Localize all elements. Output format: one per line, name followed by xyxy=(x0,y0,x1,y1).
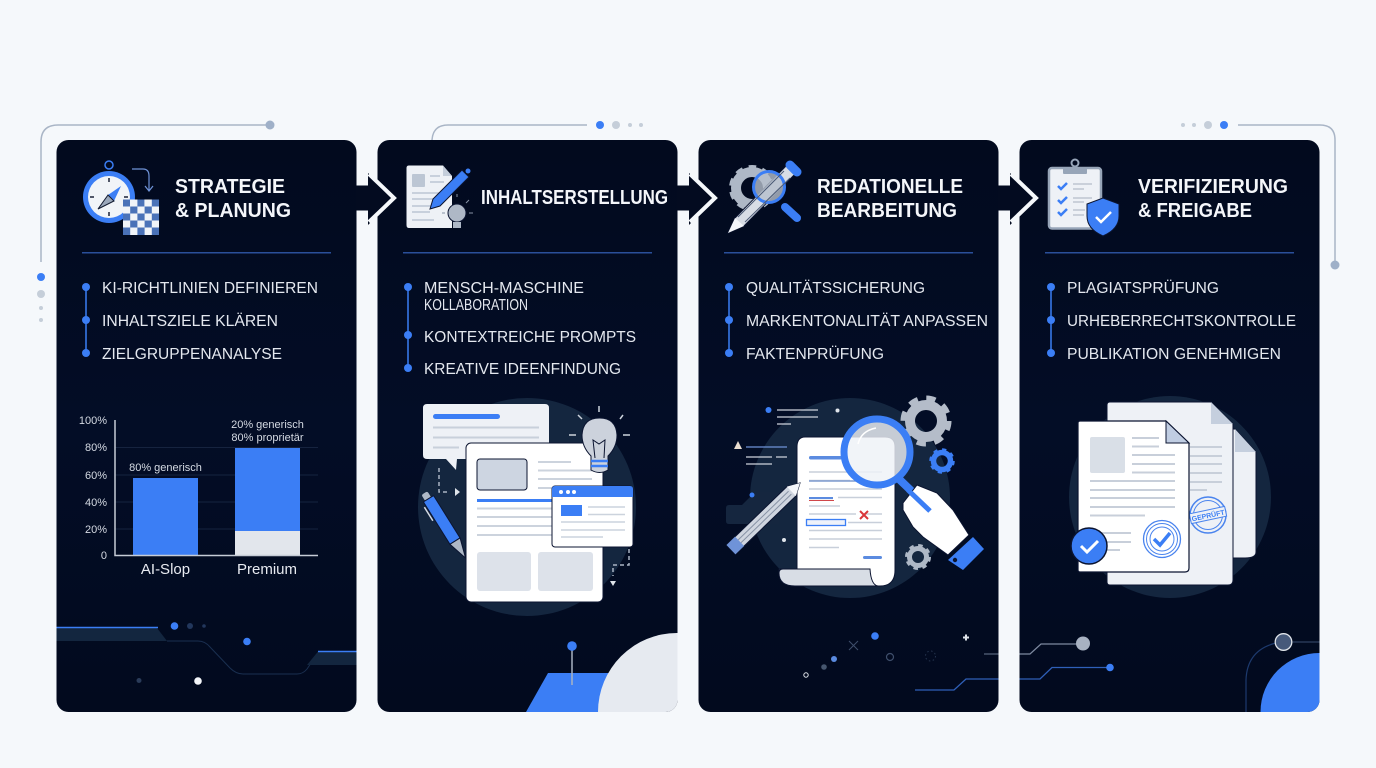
bar chart: 80% xyxy=(85,442,107,454)
heading: REDATIONELLE xyxy=(817,176,963,198)
heading: VERIFIZIERUNG xyxy=(1138,176,1288,198)
list: KI-RICHTLINIEN DEFINIEREN xyxy=(102,280,318,297)
icon: document, pen and bulb xyxy=(406,166,473,228)
list: KOLLABORATION xyxy=(424,297,528,314)
bar chart: 80% proprietär xyxy=(231,432,304,444)
connector: top second card xyxy=(432,121,643,140)
list: URHEBERRECHTSKONTROLLE xyxy=(1067,313,1296,330)
list: INHALTSZIELE KLÄREN xyxy=(102,312,278,330)
list: PUBLIKATION GENEHMIGEN xyxy=(1067,346,1281,363)
heading: STRATEGIE xyxy=(175,176,285,198)
heading xyxy=(175,176,291,222)
decoration: particles xyxy=(804,632,998,690)
illustration: verified documents: GEPRÜFT xyxy=(1191,507,1226,523)
heading: INHALTSERSTELLUNG xyxy=(481,187,668,209)
list: QUALITÄTSSICHERUNG xyxy=(746,279,925,297)
panel: Inhaltserstellung xyxy=(378,140,678,712)
bar chart: 40% xyxy=(85,497,107,509)
icon: gear, magnifier and pencil xyxy=(728,165,797,233)
heading: BEARBEITUNG xyxy=(817,200,957,222)
panel: Strategie und Planung xyxy=(56,140,357,712)
connector: top right xyxy=(1181,121,1340,270)
bar chart: AI-Slop xyxy=(141,561,190,578)
list xyxy=(725,279,988,363)
heading: & FREIGABE xyxy=(1138,200,1252,222)
list xyxy=(1047,279,1296,363)
list: KONTEXTREICHE PROMPTS xyxy=(424,329,636,346)
bar chart: 60% xyxy=(85,470,107,482)
list: ZIELGRUPPENANALYSE xyxy=(102,346,282,363)
illustration: content creation xyxy=(418,398,636,616)
list: KREATIVE IDEENFINDUNG xyxy=(424,361,621,378)
connector: top left xyxy=(37,120,274,322)
decoration: circuit lines xyxy=(56,622,357,685)
illustration: editing xyxy=(726,398,984,598)
illustration: verified documents xyxy=(1069,396,1271,598)
heading: & PLANUNG xyxy=(175,200,291,222)
bar chart: 100% xyxy=(79,415,107,427)
bar chart xyxy=(79,415,318,578)
icon: clipboard and shield xyxy=(1049,160,1119,236)
bar chart: 80% generisch xyxy=(129,462,202,474)
panel: Verifizierung und Freigabe xyxy=(1020,140,1320,712)
icon: compass and checkerboard xyxy=(83,161,159,235)
arrow: step 3 to 4 xyxy=(998,173,1037,225)
list: PLAGIATSPRÜFUNG xyxy=(1067,279,1219,297)
bar chart: Premium xyxy=(237,561,297,578)
list: FAKTENPRÜFUNG xyxy=(746,345,884,363)
list: MARKENTONALITÄT ANPASSEN xyxy=(746,312,988,330)
decoration: circuits and quarter circle xyxy=(1020,633,1320,712)
bar chart: 0 xyxy=(101,550,107,562)
arrow: step 2 to 3 xyxy=(677,173,716,225)
heading xyxy=(817,176,963,222)
list: MENSCH-MASCHINE xyxy=(424,280,584,297)
bar chart: 20% xyxy=(85,524,107,536)
arrow: step 1 to 2 xyxy=(356,173,395,225)
list xyxy=(404,280,636,378)
panel: Redaktionelle Bearbeitung xyxy=(698,140,998,712)
heading xyxy=(1138,176,1288,222)
decoration: shapes xyxy=(526,633,678,712)
bar chart: 20% generisch xyxy=(231,419,304,431)
list xyxy=(82,280,318,363)
